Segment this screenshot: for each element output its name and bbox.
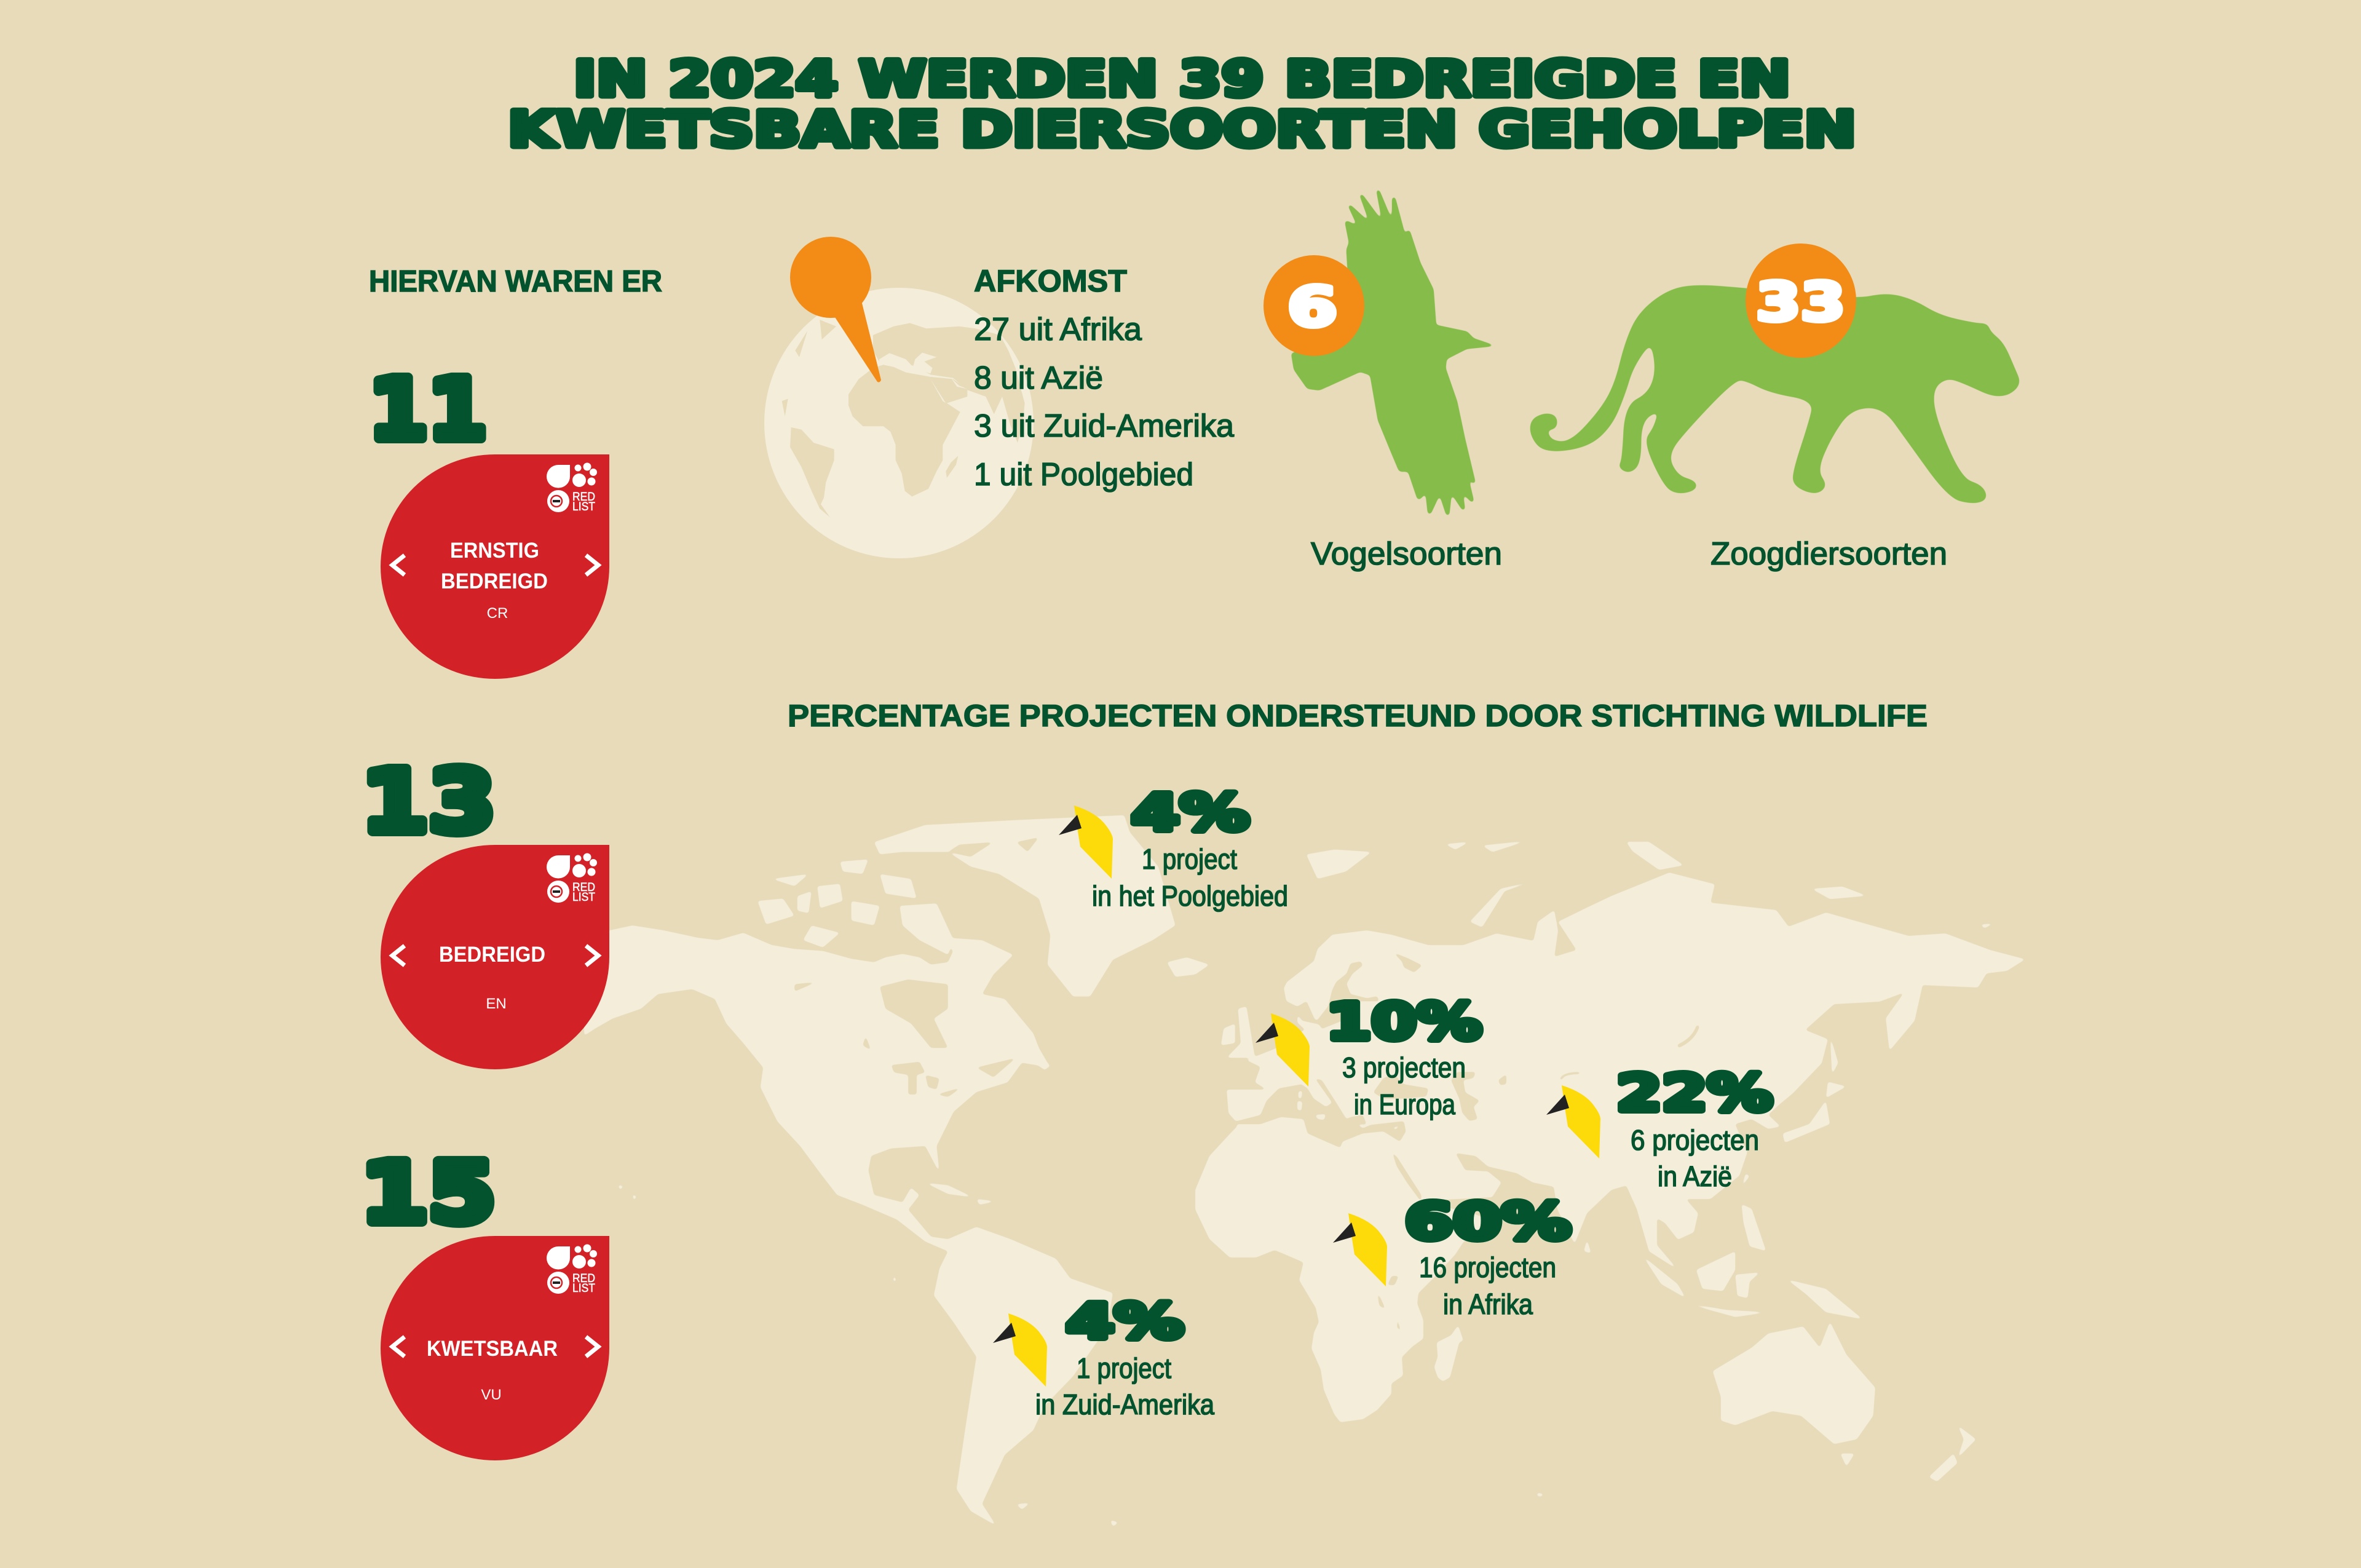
callout: zuid-amerika: 1 project (1077, 1352, 1171, 1384)
badge: ernstig bedreigd: CR (487, 605, 508, 622)
icon: orange location pin (790, 237, 881, 382)
callout: poolgebied: 4% (1131, 784, 1249, 842)
icon: red list logo (547, 1245, 597, 1295)
icon: bird beak marker (1546, 1085, 1600, 1158)
badge: 33 mammal species: 33 (1756, 272, 1845, 333)
callout: azie: 22% (1616, 1064, 1773, 1123)
title: IN 2024 WERDEN 39 BEDREIGDE EN (574, 50, 1790, 108)
icon: red list logo: LIST (572, 1282, 595, 1295)
text block: afkomst: 27 uit Afrika (974, 312, 1142, 347)
icon: red list logo: RED (572, 881, 595, 894)
label: zoogdiersoorten: Zoogdiersoorten (1710, 536, 1947, 572)
badge: 6 bird species: 6 (1287, 275, 1337, 339)
callout: europa: 10% (1326, 993, 1482, 1051)
text block: afkomst: 1 uit Poolgebied (974, 457, 1193, 493)
callout: europa (1256, 993, 1482, 1120)
icon: red list logo (547, 462, 597, 513)
icon: red list logo: LIST (572, 501, 595, 513)
icon: red list logo: RED (572, 491, 595, 504)
callout: europa: in Europa (1354, 1088, 1455, 1120)
badge: kwetsbaar: KWETSBAAR (427, 1337, 558, 1361)
badge: bedreigd: BEDREIGD (439, 943, 545, 967)
callout: poolgebied: 1 project (1142, 843, 1237, 875)
icon: red list logo: LIST (572, 891, 595, 904)
callout: europa: 3 projecten (1342, 1051, 1466, 1083)
icon: red list logo: RED (572, 1272, 595, 1285)
text block: afkomst: AFKOMST (974, 264, 1127, 298)
icon: bird beak marker (993, 1313, 1047, 1387)
callout: afrika: 60% (1405, 1193, 1571, 1251)
world map (584, 815, 2023, 1526)
callout: afrika: 16 projecten (1419, 1251, 1556, 1283)
count: 11: 11 (369, 362, 487, 459)
callout: poolgebied: in het Poolgebied (1092, 880, 1288, 912)
badge: ernstig bedreigd: BEDREIGD (441, 569, 548, 593)
callout: afrika (1333, 1193, 1571, 1320)
text block: afkomst: 8 uit Azië (974, 360, 1103, 396)
callout: zuid-amerika (993, 1294, 1214, 1420)
count: 13: 13 (362, 752, 496, 852)
icon: bird beak marker (1333, 1213, 1387, 1286)
heading: percentage projecten: PERCENTAGE PROJECTEN ONDERSTEUND DOOR STICHTING WILDLIFE (788, 699, 1928, 733)
title (508, 50, 1856, 158)
title: KWETSBARE DIERSOORTEN GEHOLPEN (508, 101, 1856, 158)
callout: azie: 6 projecten (1631, 1124, 1759, 1156)
callout: zuid-amerika: 4% (1066, 1294, 1184, 1350)
icon: bird beak marker (1059, 806, 1113, 879)
callout: poolgebied (1059, 784, 1288, 912)
label: vogelsoorten: Vogelsoorten (1311, 536, 1502, 572)
text block: afkomst (974, 264, 1234, 493)
count: 15: 15 (361, 1145, 496, 1242)
badge: bedreigd: EN (486, 996, 507, 1012)
icon: red list logo (547, 853, 597, 904)
badge: kwetsbaar (381, 1236, 609, 1460)
icon: bird beak marker (1256, 1013, 1310, 1087)
text block: afkomst: 3 uit Zuid-Amerika (974, 408, 1234, 444)
badge: kwetsbaar: VU (481, 1387, 502, 1403)
badge: 33 mammal species (1746, 244, 1856, 358)
callout: zuid-amerika: in Zuid-Amerika (1035, 1388, 1214, 1420)
badge: bedreigd (381, 845, 609, 1069)
globe (764, 288, 1034, 558)
callout: azie (1546, 1064, 1773, 1192)
badge: ernstig bedreigd (381, 454, 609, 679)
heading: hiervan waren er: HIERVAN WAREN ER (369, 265, 662, 298)
icon: green eagle silhouette (1293, 190, 1492, 515)
callout: azie: in Azië (1658, 1160, 1732, 1192)
callout: afrika: in Afrika (1443, 1288, 1533, 1320)
icon: green big cat silhouette (1532, 286, 2018, 502)
badge: 6 bird species (1264, 255, 1364, 356)
badge: ernstig bedreigd: ERNSTIG (450, 539, 539, 563)
